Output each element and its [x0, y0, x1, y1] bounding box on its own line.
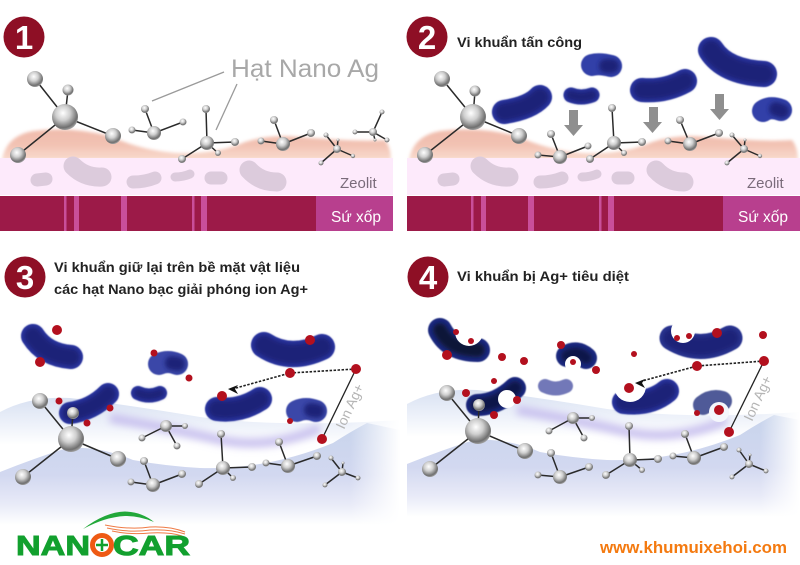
wordmark NAN: NAN — [16, 530, 90, 561]
molecule — [258, 116, 315, 151]
ghost bacteria in zeolite — [444, 166, 684, 182]
heading: Vi khuẩn giữ lại trên bề mặt vật liệu — [54, 259, 300, 275]
arrow head — [635, 379, 645, 388]
molecule — [195, 430, 256, 488]
faded damaged bacterium — [703, 400, 729, 422]
molecule — [664, 116, 723, 151]
ceramic pores — [64, 196, 207, 231]
bacterium — [763, 108, 782, 111]
badge 4 — [408, 256, 448, 298]
panel 2: bacteria attack — [406, 16, 800, 231]
arrow down — [643, 107, 662, 133]
bacterium — [138, 393, 160, 396]
small molecule — [318, 132, 355, 166]
badge 1 — [4, 16, 44, 58]
label: Zeolit: Zeolit — [340, 175, 378, 192]
badge 3 — [4, 256, 46, 298]
molecule — [586, 104, 646, 163]
small molecule — [352, 110, 390, 142]
ion line — [322, 369, 356, 439]
ion line — [729, 361, 764, 432]
damaged bacterium — [440, 318, 483, 350]
bacterium — [264, 345, 322, 354]
silver ions — [35, 325, 361, 444]
pink surface hill — [409, 129, 798, 160]
molecule — [128, 105, 186, 140]
label: Sứ xốp: Sứ xốp — [738, 209, 788, 226]
large molecule — [422, 385, 533, 477]
large molecule — [417, 71, 527, 163]
car speed lines — [105, 525, 185, 536]
pointer lines — [152, 72, 237, 130]
bacterium — [217, 399, 260, 410]
damaged bacterium — [477, 388, 516, 408]
large molecule — [10, 71, 121, 163]
heading: Vi khuẩn tấn công — [457, 34, 582, 50]
molecule — [602, 422, 662, 479]
label: Sứ xốp: Sứ xốp — [331, 209, 381, 226]
ceramic label block — [723, 196, 800, 231]
faded bacterium — [545, 386, 566, 388]
badge 4: 4 — [419, 259, 438, 296]
badge 2: 2 — [418, 19, 436, 56]
panel 4: bacteria destroyed — [407, 256, 800, 522]
bacterium — [711, 50, 764, 74]
bacterium — [70, 394, 108, 413]
bacterium — [571, 95, 592, 97]
porous ceramic layer — [407, 196, 723, 231]
label: Zeolit: Zeolit — [747, 175, 785, 192]
large molecule — [15, 393, 126, 485]
bacterium — [33, 336, 71, 357]
arrow down — [710, 94, 729, 120]
molecule — [534, 449, 593, 484]
small molecule — [322, 456, 360, 488]
ceramic label block — [316, 196, 393, 231]
molecule — [262, 438, 321, 473]
heading: các hạt Nano bạc giải phóng ion Ag+ — [54, 281, 308, 297]
porous ceramic layer — [0, 196, 316, 231]
bacterium — [504, 97, 540, 112]
bacterium — [592, 64, 612, 66]
panel 3: bacteria held, ions released — [0, 256, 400, 530]
badge 1: 1 — [15, 19, 33, 56]
wave background — [407, 388, 800, 522]
badge 3: 3 — [16, 259, 34, 296]
zeolite layer — [407, 158, 800, 195]
arrow head — [228, 385, 238, 394]
panel 1: Nano Ag particles on material — [0, 16, 393, 231]
small molecule — [724, 132, 762, 166]
orange O with plus — [92, 536, 112, 554]
label: Ion Ag+: Ion Ag+ — [332, 381, 367, 431]
molecule — [128, 457, 186, 492]
zeolite layer — [0, 158, 393, 195]
ghost bacteria in zeolite — [37, 166, 277, 182]
molecule — [534, 130, 592, 164]
molecule — [546, 412, 595, 442]
damaged bacterium — [671, 319, 730, 346]
silver ions — [442, 328, 769, 437]
molecule — [178, 105, 239, 163]
bacterium — [297, 409, 317, 411]
damaged bacterium — [565, 353, 586, 372]
dotted ion path — [642, 361, 764, 381]
molecule — [138, 420, 188, 450]
small molecule — [730, 448, 768, 480]
molecule — [670, 430, 728, 465]
bacterium — [642, 81, 685, 90]
heading: Vi khuẩn bị Ag+ tiêu diệt — [457, 268, 629, 284]
logo: NANOCAR — [16, 512, 190, 561]
ceramic pores — [471, 196, 614, 231]
wordmark CAR: CAR — [113, 530, 190, 561]
pink surface hill — [2, 129, 391, 160]
label: Hạt Nano Ag: Hạt Nano Ag — [231, 55, 379, 83]
badge 2 — [406, 16, 448, 58]
dotted ion path — [236, 369, 356, 388]
car roof swoosh — [83, 512, 154, 529]
website url: www.khumuixehoi.com — [599, 538, 787, 557]
wave background — [0, 395, 400, 530]
arrow down — [564, 110, 583, 136]
label: Ion Ag+: Ion Ag+ — [740, 373, 775, 423]
damaged bacterium — [614, 370, 667, 403]
bacterium — [159, 362, 178, 364]
heading — [54, 259, 308, 297]
